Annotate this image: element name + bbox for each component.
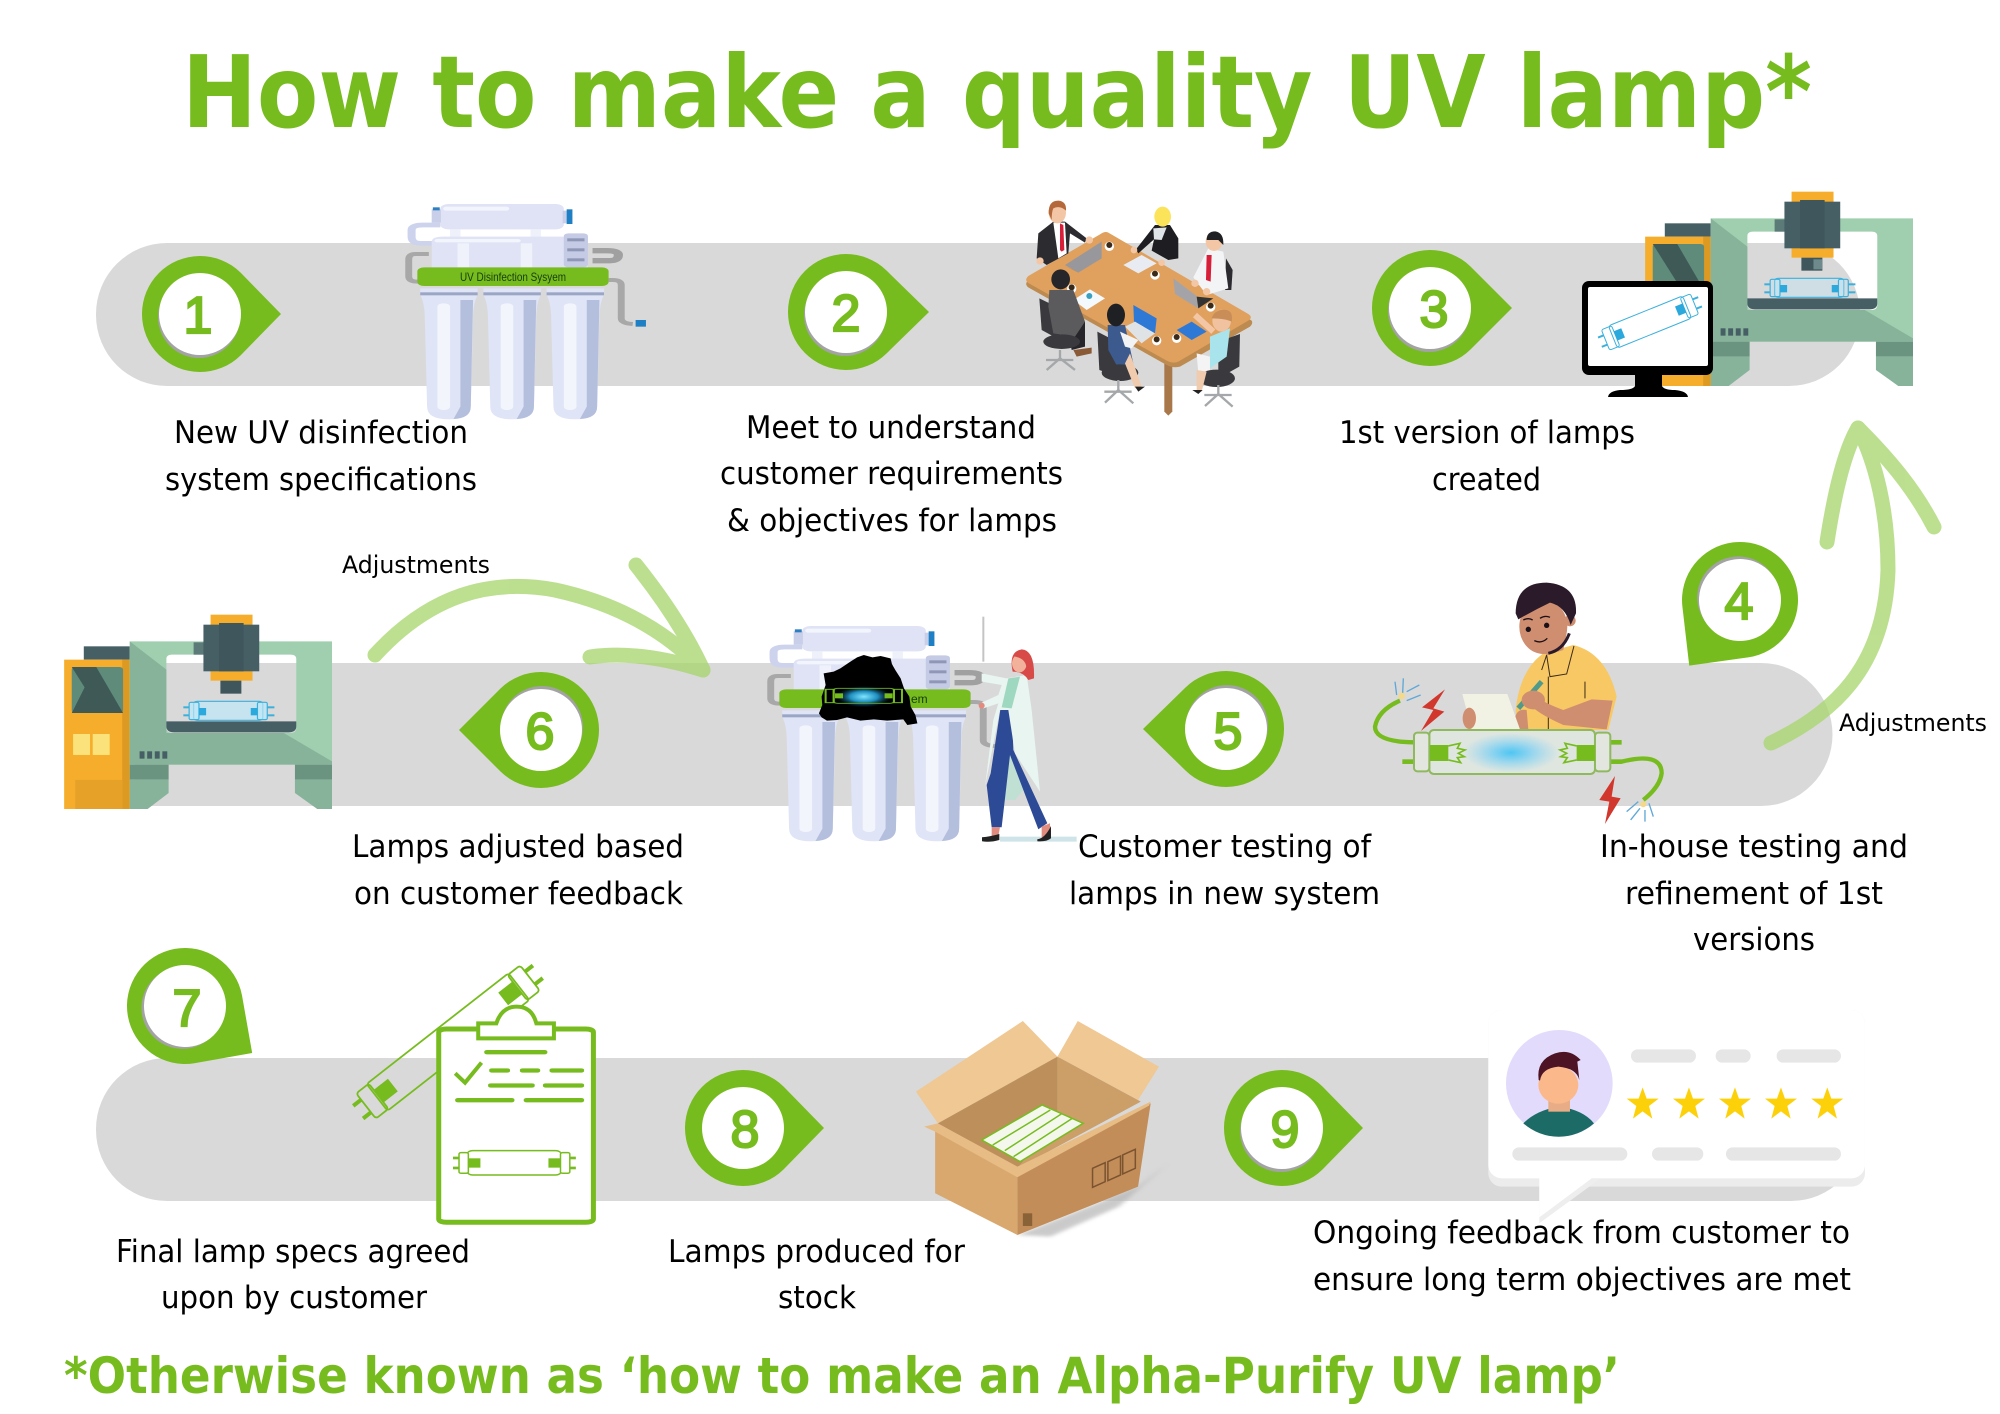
step 3 marker: 3 xyxy=(1420,281,1448,339)
step 1 caption xyxy=(165,415,477,498)
step 1 marker: 1 xyxy=(184,287,212,345)
step 5 caption xyxy=(1069,829,1380,912)
step 7 caption: upon by customer xyxy=(161,1280,427,1316)
step 8 marker xyxy=(685,1070,824,1186)
label: adjustments top: Adjustments xyxy=(342,551,490,579)
step 9 caption: Ongoing feedback from customer to xyxy=(1313,1215,1850,1251)
step 6 caption: Lamps adjusted based xyxy=(352,829,684,865)
step 2 marker: 2 xyxy=(832,285,860,343)
step 9 caption xyxy=(1313,1215,1851,1298)
label: adjustments right: Adjustments xyxy=(1839,709,1987,737)
panel: top process bar xyxy=(96,243,1860,386)
step 8 caption xyxy=(668,1234,965,1316)
review bubble xyxy=(1488,1010,1865,1223)
illustration: technician testing lamp xyxy=(1375,583,1662,824)
rating stars xyxy=(1627,1087,1843,1119)
step 4 marker: 4 xyxy=(1725,573,1753,631)
step 3 caption: 1st version of lamps xyxy=(1339,415,1635,451)
step 7 marker: 7 xyxy=(173,980,201,1038)
step 9 marker: 9 xyxy=(1271,1101,1299,1159)
illustration: specification clipboard xyxy=(348,958,593,1222)
panel: middle process bar xyxy=(135,663,1832,806)
icon: monitor with lamp xyxy=(1582,281,1713,397)
shirt and man xyxy=(1462,583,1617,730)
step 4 caption: refinement of 1st xyxy=(1625,876,1883,912)
step 4 caption: versions xyxy=(1693,922,1815,958)
step 8 caption: Lamps produced for xyxy=(668,1234,965,1270)
step 1 caption: system specifications xyxy=(165,462,477,498)
placeholder review lines xyxy=(1512,1049,1841,1161)
step 8 marker: 8 xyxy=(731,1101,759,1159)
step 5 marker: 5 xyxy=(1214,703,1242,761)
lamp with glow xyxy=(1375,678,1662,822)
step 2 caption xyxy=(720,410,1063,539)
title: How to make a quality UV lamp* xyxy=(182,34,1812,151)
step 8 caption: stock xyxy=(778,1280,856,1316)
panel: bottom process bar xyxy=(96,1058,1862,1201)
step 1 caption: New UV disinfection xyxy=(174,415,468,451)
step 3 caption: created xyxy=(1432,462,1541,498)
step 7 caption xyxy=(116,1234,470,1316)
step 2 caption: customer requirements xyxy=(720,456,1063,492)
icon: lightning bolts xyxy=(1421,689,1621,824)
step 6 marker xyxy=(459,672,599,788)
footnote: *Otherwise known as ‘how to make an Alpha-Purify UV lamp’ xyxy=(64,1347,1620,1405)
illustration: UV disinfection system: UV Disinfection Sysyem xyxy=(460,270,566,284)
illustration: cardboard box of lamps xyxy=(916,1021,1168,1237)
step 1 marker xyxy=(142,256,281,372)
illustration: UV system with lamp installed xyxy=(771,626,995,841)
step 6 marker: 6 xyxy=(526,703,554,761)
step 5 marker xyxy=(1143,671,1284,787)
step 4 marker xyxy=(1643,519,1821,701)
illustration: lamp machine and monitor xyxy=(1582,192,1913,397)
icon: customer avatar xyxy=(1506,1030,1613,1137)
step 9 marker xyxy=(1224,1070,1363,1186)
step 2 caption: Meet to understand xyxy=(746,410,1036,446)
step 6 caption: on customer feedback xyxy=(354,876,683,912)
arrow: adjustments back to step 3 xyxy=(1771,428,1934,743)
illustration: UV disinfection system xyxy=(409,204,646,419)
step 3 marker xyxy=(1372,250,1512,366)
icon: glowing lamp on black patch xyxy=(819,655,917,725)
step 7 marker xyxy=(104,925,285,1101)
step 3 caption xyxy=(1339,415,1635,498)
illustration: meeting around table xyxy=(1026,201,1252,416)
icon: lamp behind clipboard xyxy=(348,958,548,1126)
step 2 caption: & objectives for lamps xyxy=(727,503,1057,539)
step 5 caption: lamps in new system xyxy=(1069,876,1380,912)
step 4 caption: In-house testing and xyxy=(1600,829,1908,865)
illustration: UV system with lamp installed: em xyxy=(911,692,928,706)
step 4 caption xyxy=(1600,829,1908,958)
step 7 caption: Final lamp specs agreed xyxy=(116,1234,470,1270)
illustration: scientist xyxy=(979,617,1077,842)
step 6 caption xyxy=(352,829,684,912)
arrow: adjustments to customer testing xyxy=(375,565,703,670)
illustration: adjustment machine xyxy=(64,615,332,809)
step 2 marker xyxy=(788,254,929,370)
step 9 caption: ensure long term objectives are met xyxy=(1313,1262,1851,1298)
step 5 caption: Customer testing of xyxy=(1078,829,1372,865)
